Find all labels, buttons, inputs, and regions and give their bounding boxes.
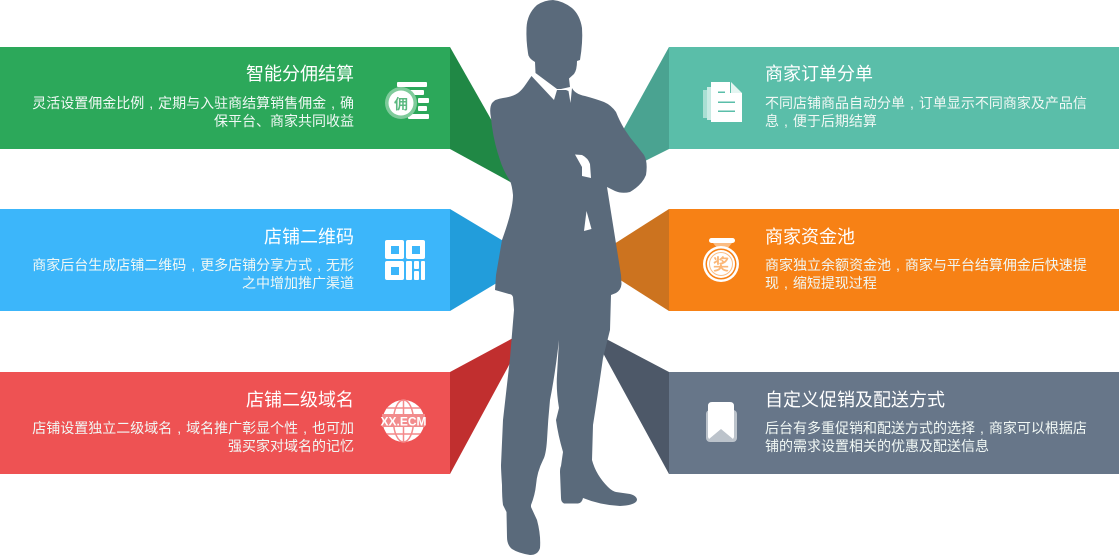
panel: commission settlement: [0, 47, 534, 195]
heading: QR code: 店铺二维码: [264, 227, 354, 247]
figure: businessman silhouette: [490, 0, 647, 555]
heading: merchant fund pool: 商家资金池: [765, 227, 855, 247]
text: fund pool description: [765, 257, 1087, 291]
icon: globe: [380, 400, 427, 442]
text: commission description: 灵活设置佣金比例 , 定期与入驻商结算销售佣金 , 确: [32, 95, 354, 111]
heading: commission settlement: 智能分佣结算: [246, 64, 354, 84]
text: domain description: 店铺设置独立二级域名 , 域名推广彰显个性 , 也可加: [32, 420, 354, 436]
icon: bookmark: [706, 402, 737, 442]
icon: commission coin: 佣: [394, 96, 408, 112]
text: QR description: 之中增加推广渠道: [242, 275, 354, 291]
text: order description: 息 , 便于后期结算: [765, 113, 877, 129]
icon: medal: 奖: [713, 255, 729, 274]
text: commission description: [32, 95, 354, 129]
panel: second-level domain: [0, 330, 528, 474]
icon: document: [703, 82, 742, 122]
icon: medal: [703, 238, 739, 282]
text: fund pool description: 现 , 缩短提现过程: [765, 275, 877, 291]
heading: custom promotions: 自定义促销及配送方式: [765, 390, 945, 410]
panel: order splitting: [591, 47, 1119, 188]
panel: merchant fund pool: [589, 209, 1119, 311]
text: QR description: 商家后台生成店铺二维码 , 更多店铺分享方式 , 无形: [32, 257, 354, 273]
text: domain description: 强买家对域名的记忆: [228, 438, 354, 454]
icon: globe: XX.ECM: [380, 414, 427, 428]
text: order description: [765, 95, 1087, 129]
text: promotions description: 铺的需求设置相关的优惠及配送信息: [765, 438, 989, 454]
text: order description: 不同店铺商品自动分单 , 订单显示不同商家及产品信: [765, 95, 1087, 111]
panel: QR code: [0, 209, 535, 311]
text: QR description: [32, 257, 354, 291]
text: domain description: [32, 420, 354, 454]
text: promotions description: 后台有多重促销和配送方式的选择 , 商家可以根据店: [765, 420, 1087, 436]
text: promotions description: [765, 420, 1087, 454]
panel: custom promotions: [591, 331, 1119, 474]
icon: QR code: [385, 240, 425, 280]
icon: commission coin: [385, 82, 429, 119]
text: commission description: 保平台、商家共同收益: [214, 113, 354, 129]
text: fund pool description: 商家独立余额资金池 , 商家与平台结算佣金后快速提: [765, 257, 1087, 273]
heading: second-level domain: 店铺二级域名: [246, 390, 354, 410]
heading: order splitting: 商家订单分单: [765, 64, 873, 84]
